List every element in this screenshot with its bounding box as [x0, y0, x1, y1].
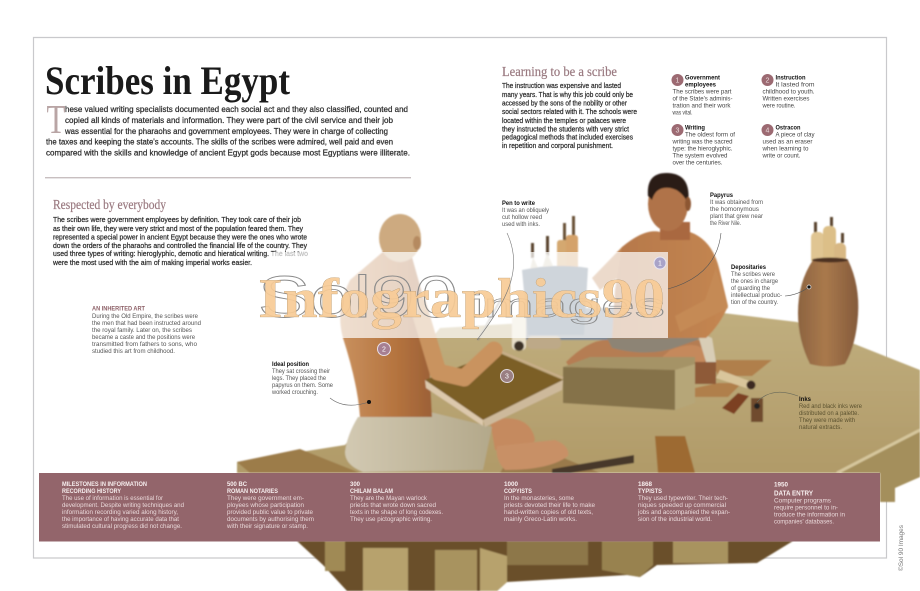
- label: pen to write: used with inks.: [502, 221, 540, 228]
- intro text block: was essential for the pharaohs and government employees. They were in charge of collecting: [64, 126, 388, 136]
- milestone: 1868: TYPISTS: [638, 488, 663, 495]
- milestones intro: RECORDING HISTORY: [62, 488, 122, 495]
- timeline band: [39, 473, 880, 542]
- label: ideal position: Ideal position: [272, 361, 309, 368]
- label: inks: [799, 396, 862, 431]
- label: pen to write: Pen to write: [502, 200, 535, 207]
- milestone: 1868: They used typewriter. Their tech-: [638, 495, 728, 502]
- milestone: 1950: Computer programs: [774, 498, 831, 504]
- item 3: writing: The oldest form of: [685, 132, 735, 138]
- item 2: instruction: 2: [766, 78, 770, 84]
- milestone: 1950: 1950: [774, 482, 788, 488]
- marker 2: [378, 342, 390, 356]
- label: depositaries: Depositaries: [731, 264, 766, 271]
- section: learning to be a scribe: they instructed the students with very strict: [502, 124, 629, 134]
- section: respected by everybody: used three types of writing: hieroglyphic, demotic and hieratical writing. The last two: [53, 249, 308, 258]
- section: learning to be a scribe: Learning to be a scribe: [502, 65, 617, 80]
- label: papyrus: Papyrus: [710, 192, 733, 199]
- intro text block: the taxes and keeping the state's accounts. The skills of the scribes were admired, well paid and even: [46, 136, 393, 146]
- sidebar: an inherited art: [92, 306, 201, 355]
- marker 3: [500, 370, 514, 382]
- milestones intro: MILESTONES IN INFORMATION: [62, 481, 147, 488]
- intro text block: [46, 96, 410, 158]
- label: ideal position: papyrus on them. Some: [272, 382, 333, 389]
- milestone: 1950: companies' databases.: [774, 518, 834, 526]
- leader line: depositaries: [785, 285, 811, 296]
- item 4: ostracon: when learning to: [762, 146, 809, 152]
- milestone: 1000: hand-written copies of old texts,: [504, 509, 593, 516]
- label: inks: distributed on a palette.: [799, 410, 859, 417]
- sidebar: an inherited art: During the Old Empire, the scribes were: [92, 313, 198, 320]
- item 4: ostracon: Ostracon: [776, 124, 800, 132]
- marker 2: 2: [382, 346, 386, 354]
- marker 1: 1: [658, 260, 662, 268]
- section: learning to be a scribe: in repetition and corporal punishment.: [502, 141, 613, 150]
- item 1: government employees: employees: [685, 82, 716, 88]
- intro text block: compared with the skills and knowledge of ancient Egypt gods because most Egyptians were illiterate.: [46, 148, 410, 158]
- item 1: government employees: tration and their work: [672, 102, 731, 110]
- item 3: writing: 3: [676, 128, 680, 134]
- milestone: 300: CHILAM BALAM: [350, 488, 393, 495]
- section: respected by everybody: Respected by everybody: [53, 198, 166, 213]
- label: papyrus: the River Nile.: [710, 220, 741, 227]
- milestone: 1000: In the monasteries, some: [504, 495, 574, 502]
- platform underside bricks: [297, 541, 793, 591]
- label: papyrus: It was obtained from: [710, 199, 763, 206]
- watermark backing panel: [270, 252, 668, 338]
- item 1: government employees: Government: [685, 74, 721, 82]
- item 2: instruction: were routine.: [762, 102, 796, 110]
- front scribe: [340, 214, 568, 472]
- label: depositaries: [731, 264, 782, 306]
- sidebar: an inherited art: transmitted from fathers to sons, who: [92, 341, 197, 348]
- back scribe: [566, 173, 728, 368]
- label: inks: natural extracts.: [799, 424, 842, 431]
- rear floor in shadow: [525, 308, 670, 340]
- label: inks: They were made with: [799, 417, 855, 424]
- label: papyrus: plant that grew near: [710, 213, 764, 220]
- item 2: instruction: It lasted from: [776, 82, 815, 88]
- milestone: 500 BC: with their signature or stamp.: [226, 523, 308, 530]
- sidebar: an inherited art: studied this art from childhood.: [92, 348, 175, 355]
- item 3: writing: Writing: [685, 124, 705, 132]
- milestone: 1950: DATA ENTRY: [774, 488, 813, 498]
- icon: storage pot with scrolls: [798, 217, 858, 366]
- section: learning to be a scribe: many years. That is why this job could only be: [502, 90, 633, 99]
- item 1: government employees: of the State's adminis-: [672, 96, 732, 102]
- leader line: inks: [757, 392, 798, 402]
- label: papyrus: the homonymous: [710, 206, 759, 213]
- milestone: 1868: 1868: [638, 481, 652, 488]
- reed pen set: [552, 455, 634, 473]
- item 2: instruction: Written exercises: [762, 96, 810, 102]
- item 3: writing: writing was the sacred: [672, 138, 733, 146]
- platform right side: [837, 430, 920, 502]
- sidebar: an inherited art: the men that had been instructed around: [92, 320, 201, 327]
- milestones intro: the importance of having accurate data that: [62, 516, 179, 523]
- milestone: 1000: mainly Greco-Latin works.: [504, 516, 577, 523]
- item 4: ostracon: [762, 124, 815, 160]
- item 4: ostracon: write or count.: [762, 152, 801, 160]
- section: respected by everybody: down the orders of the pharaohs and controlled the financial life of the country. They: [53, 241, 307, 250]
- item 3: writing: type: the hieroglyphic.: [672, 146, 733, 152]
- milestone: 1000: priests devoted their life to make: [504, 502, 595, 509]
- label: depositaries: of guarding the: [731, 285, 770, 292]
- milestone: 300: texts in the shape of long codexes.: [350, 509, 443, 516]
- image credit: ©Sol 90 Images: [897, 525, 905, 571]
- section: respected by everybody: represented a special power in ancient Egypt because they were the ones who wrote: [53, 232, 307, 242]
- section: learning to be a scribe: social sectors related with it. The schools were: [502, 107, 637, 116]
- milestone: 1868: [637, 481, 730, 523]
- label: ideal position: legs. They placed the: [272, 375, 326, 382]
- label: depositaries: tion of the country.: [731, 299, 778, 306]
- label: ideal position: [271, 361, 333, 396]
- milestones intro: stimulated cultural progress did not change.: [62, 523, 182, 530]
- milestones intro: The use of information is essential for: [62, 495, 163, 502]
- milestones intro: development. Despite writing techniques and: [62, 502, 184, 509]
- milestone: 1000: 1000: [504, 481, 518, 488]
- milestone: 300: [350, 481, 443, 523]
- label: ideal position: They sat crossing their: [272, 368, 331, 375]
- section: learning to be a scribe: located within the temples or palaces were: [502, 116, 626, 125]
- label: depositaries: intellectual produc-: [731, 292, 782, 299]
- scrolls on floor: [512, 315, 756, 390]
- milestone: 500 BC: provided public value to private: [227, 509, 313, 516]
- item 4: ostracon: used as an eraser: [762, 138, 813, 146]
- sidebar: an inherited art: the royal family. Later on, the scribes: [92, 327, 192, 334]
- wooden box: [655, 436, 695, 473]
- leader line: papyrus: [668, 233, 721, 289]
- writing jar with pens: [522, 216, 588, 335]
- label: depositaries: the ones in charge: [731, 278, 778, 285]
- sidebar: an inherited art: became a caste and the positions were: [92, 334, 195, 341]
- section: respected by everybody: [52, 198, 308, 267]
- section: respected by everybody: were the most used with the aim of making imperial works easier.: [52, 258, 252, 267]
- item 3: writing: The system evolved: [672, 152, 728, 160]
- milestone: 500 BC: documents by authorising them: [227, 516, 314, 523]
- milestone: 300: 300: [350, 481, 360, 488]
- watermark text: Infographics90: [258, 268, 665, 330]
- milestone: 500 BC: 500 BC: [227, 481, 247, 488]
- item 2: instruction: childhood to youth.: [762, 88, 815, 96]
- milestone: 300: They use pictographic writing.: [350, 516, 432, 523]
- label: inks: Red and black inks were: [799, 403, 862, 410]
- milestones intro: [62, 481, 184, 530]
- item 2: instruction: Instruction: [776, 74, 806, 82]
- intro text block: copied all kinds of materials and information. They were part of the civil service and their job: [65, 115, 393, 125]
- milestone: 500 BC: They were government em-: [227, 495, 304, 502]
- milestone: 1000: [504, 481, 595, 523]
- milestone: 1950: require personnel to in-: [774, 504, 838, 512]
- milestone: 1868: niques speeded up commercial: [638, 502, 726, 509]
- platform floor: [237, 313, 920, 473]
- milestone: 1868: jobs and accompanied the expan-: [637, 509, 730, 516]
- intro text block: T: [46, 96, 66, 142]
- leader line: ideal position: [330, 398, 371, 405]
- milestone: 1950: [774, 482, 845, 526]
- milestone: 500 BC: [226, 481, 314, 530]
- leader line: pen: [477, 233, 514, 340]
- marker 3: 3: [505, 374, 509, 380]
- item 4: ostracon: 4: [766, 128, 770, 134]
- item 3: writing: [672, 124, 735, 166]
- milestone: 500 BC: ROMAN NOTARIES: [227, 488, 279, 495]
- section: learning to be a scribe: pedagogical methods that included exercises: [502, 132, 633, 142]
- watermark text: Sol90: [258, 265, 458, 330]
- ink palette: [722, 393, 763, 422]
- stone block: [563, 357, 716, 410]
- label: ideal position: worked crouching.: [271, 389, 318, 396]
- milestone: 500 BC: ployees whose participation: [227, 502, 304, 509]
- milestone: 1868: sion of the industrial world.: [638, 516, 712, 523]
- milestone: 1950: troduce the information in: [774, 512, 845, 518]
- section: learning to be a scribe: accessed by the sons of the nobility or other: [502, 98, 628, 108]
- label: depositaries: The scribes were: [731, 271, 775, 278]
- item 4: ostracon: A piece of clay: [776, 132, 815, 138]
- milestone: 1000: COPYISTS: [504, 488, 533, 495]
- milestone: 300: priests that wrote down sacred: [350, 502, 436, 509]
- intro text block: hese valued writing specialists documented each social act and they also classified, counted and: [65, 104, 408, 114]
- sidebar: an inherited art: AN INHERITED ART: [92, 306, 145, 312]
- label: pen to write: cut hollow reed: [502, 214, 542, 221]
- illustration: scribes on stone platform: [237, 173, 920, 591]
- label: pen to write: It was an obliquely: [502, 207, 550, 214]
- marker 1: [654, 257, 666, 269]
- item 2: instruction: [762, 74, 815, 110]
- item 3: writing: over the centuries.: [672, 160, 723, 166]
- milestone: 300: They are the Mayan warlock: [350, 495, 428, 502]
- label: pen to write: [502, 200, 550, 228]
- section: learning to be a scribe: The instruction was expensive and lasted: [502, 81, 621, 90]
- section: respected by everybody: as their own life, they were very strict and most of the population feared them. They: [53, 224, 303, 233]
- reed mats: [237, 360, 772, 473]
- item 1: government employees: 1: [676, 78, 680, 84]
- label: papyrus: [710, 192, 764, 227]
- watermark text: images: [470, 287, 665, 325]
- item 1: government employees: was vital.: [672, 110, 693, 116]
- label: inks: Inks: [799, 396, 811, 403]
- milestones intro: information recording varied along history,: [62, 509, 178, 516]
- item 1: government employees: [672, 74, 732, 116]
- item 1: government employees: The scribes were part: [672, 88, 732, 96]
- title: Scribes in Egypt: [45, 58, 291, 103]
- section: respected by everybody: The scribes were government employees by definition. They took care of their job: [53, 215, 301, 224]
- section: learning to be a scribe: [502, 65, 637, 150]
